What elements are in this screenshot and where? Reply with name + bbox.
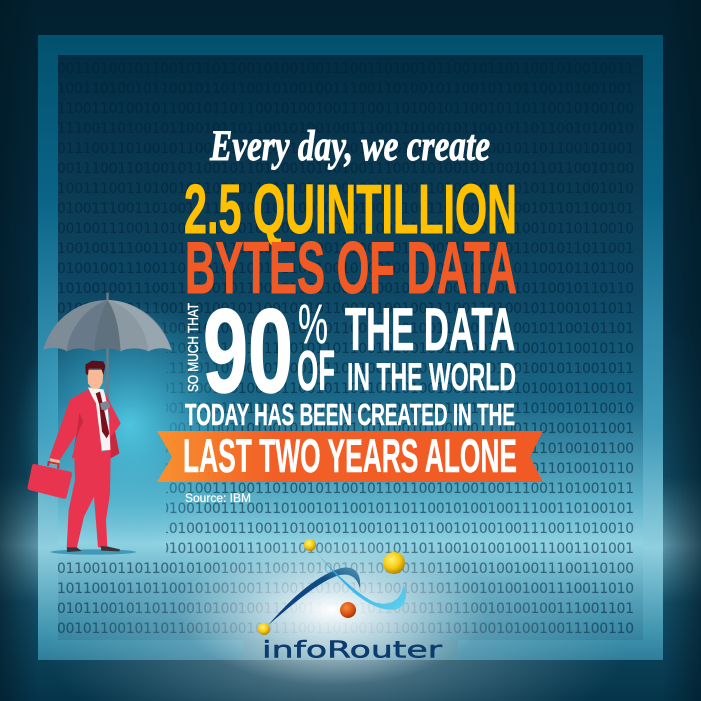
binary digit pattern: 1001110011010010110010110110010100100111001101001011001011011001010 [57,181,634,197]
binary digit pattern: 1100110100101100101101100101001001110011010010110010110110010100100 [57,101,634,117]
ribbon banner [157,429,543,482]
logo swooshes [268,553,406,625]
tie [96,392,109,438]
illustration: businessman with umbrella [28,293,172,555]
logo wordmark: infoRouter [262,638,443,664]
binary digit pattern: 1001010010011100110100101100101101100101001001110011010010110010110 [57,341,634,357]
binary digit pattern: 1011001010010011100110100101100101101100101001001110011010010110010 [57,401,634,417]
binary digit pattern: 0100100111001101001011001011011001010010011100110100101100101101100 [57,261,634,277]
big number 90: 90 [203,285,293,418]
line: the data: THE DATA [345,296,515,363]
binary digit pattern: 0110010100100111001101001011001011011001010010011100110100101100101 [57,381,634,397]
binary digit pattern: 0010011100110100101100101101100101001001110011010010110010110110010 [57,221,634,237]
inner panel [58,55,643,640]
umbrella [43,293,172,403]
hand [50,458,60,465]
binary digit pattern: 0100111001101001011001011011001010010011100110100101100101101100101 [57,201,634,217]
heading: every day: Every day, we create [209,123,490,170]
jacket and arms [49,389,121,461]
logo gap in frame [243,640,458,660]
binary digit pattern: 0010110110010100100111001101001011001011011001010010011100110100101 [57,501,634,517]
binary digit pattern: 1110011010010110010110110010100100111001101001011001011011001010010 [57,121,634,137]
binary digit pattern: 1001001110011010010110010110110010100100111001101001011001011011001 [57,241,634,257]
hair [85,361,105,375]
statistic block: 90 percent [185,285,516,418]
binary digit pattern: 0010110010110110010100100111001101001011001011011001010010011100110 [57,621,634,637]
binary digit pattern: 1010010011100110100101100101101100101001001110011010010110010110110 [57,281,634,297]
binary digit pattern: 1100101101100101001001110011010010110010110110010100100111001101001 [57,541,634,557]
binary digit pattern: 1100101001001110011010010110010110110010100100111001101001011001011 [57,361,634,377]
binary digit pattern: 0110010110110010100100111001101001011001011011001010010011100110100 [57,561,634,577]
logo: inforouter [258,539,443,664]
hand on pole [100,401,111,411]
binary digit pattern: 0010100100111001101001011001011011001010010011100110100101100101101 [57,321,634,337]
binary digit pattern: 1011011001010010011100110100101100101101100101001001110011010010110 [57,461,634,477]
percent sign: % [298,292,328,355]
line: in the world: IN THE WORLD [347,356,516,399]
binary digit pattern: 1101100101001001110011010010110010110110010100100111001101001011001 [57,421,634,437]
briefcase [28,462,72,499]
binary digit pattern: 1001011011001010010011100110100101100101101100101001001110011010010 [57,521,634,537]
binary digit pattern [57,61,634,637]
binary digit pattern: 0111001101001011001011011001010010011100110100101100101101100101001 [57,141,634,157]
trousers [67,449,111,549]
neck and face [87,370,103,389]
binary digit pattern: 1011001011011001010010011100110100101100101101100101001001110011010 [57,581,634,597]
outer frame [38,35,663,660]
shoes [67,546,120,552]
binary digit pattern: 0011100110100101100101101100101001001110011010010110010110110010100 [57,161,634,177]
binary digit pattern: 0101100101101100101001001110011010010110010110110010100100111001101 [57,601,634,617]
side text: so much that: SO MUCH THAT [185,303,202,392]
statistic block: 90 percent: OF [297,339,335,403]
logo balls [258,539,405,635]
binary digit pattern: 0101101100101001001110011010010110010110110010100100111001101001011 [57,481,634,497]
binary digit pattern: 0110110010100100111001101001011001011011001010010011100110100101100 [57,441,634,457]
man shadow [51,549,136,555]
shirt [88,387,111,451]
binary digit pattern: 0101001001110011010010110010110110010100100111001101001011001011011 [57,301,634,317]
source: Source: IBM [185,491,251,505]
binary digit pattern: 0011010010110010110110010100100111001101001011001011011001010010011 [57,61,634,77]
binary digit pattern: 1001101001011001011011001010010011100110100101100101101100101001001 [57,81,634,97]
